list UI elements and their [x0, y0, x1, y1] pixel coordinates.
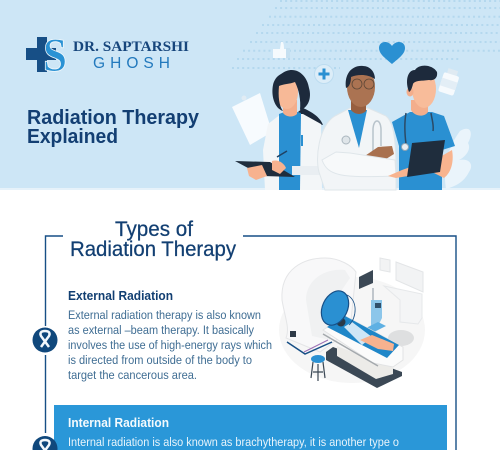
- item: internal radiation: [32, 405, 447, 450]
- scanner body: [282, 258, 356, 352]
- external radiation body text: as external –beam therapy. It basically: [68, 323, 255, 337]
- section heading: [70, 217, 236, 261]
- title: Explained: [27, 125, 118, 148]
- logo icon: cross with S: [26, 29, 67, 82]
- title: [27, 106, 200, 148]
- header banner: [0, 0, 500, 190]
- section heading: Types of: [115, 217, 193, 241]
- external radiation heading: External Radiation: [68, 288, 173, 303]
- doctor: woman: [235, 70, 323, 190]
- doctor: nurse: [388, 66, 455, 190]
- machine base trim: [304, 340, 328, 352]
- logo surname: GHOSH: [93, 55, 170, 72]
- stool: [311, 355, 325, 381]
- icon: ribbon: [32, 328, 58, 352]
- item: external radiation: [32, 288, 272, 382]
- icon: pill bottle: [438, 67, 461, 96]
- section heading: Radiation Therapy: [70, 237, 236, 261]
- panel: types of radiation therapy: [32, 217, 456, 450]
- clipboard paper: [232, 93, 272, 145]
- internal radiation heading: Internal Radiation: [68, 415, 169, 430]
- table top: [323, 316, 403, 367]
- title: Radiation Therapy: [27, 106, 200, 129]
- external radiation body text: involves the use of high-energy rays which: [68, 338, 272, 352]
- logo icon: cross with S: S: [43, 29, 67, 82]
- frame outline: [46, 236, 456, 450]
- logo name: DR. SAPTARSHI: [73, 39, 189, 55]
- iv stand: [366, 288, 386, 332]
- icon: ribbon: [32, 436, 58, 450]
- bore hood: [316, 286, 354, 330]
- illustration: patient in radiation machine: [279, 258, 425, 388]
- cabinet: [384, 286, 422, 324]
- doctor: man: [318, 66, 396, 190]
- logo: [26, 29, 189, 82]
- internal radiation panel background: [54, 405, 447, 450]
- plant leaves: [445, 129, 471, 189]
- external radiation body text: target the cancerous area.: [68, 368, 197, 382]
- icon: thumbs up: [273, 42, 290, 58]
- external radiation body text: External radiation therapy is also known: [68, 308, 261, 322]
- monitor: [359, 270, 373, 289]
- table base: [326, 347, 402, 388]
- external radiation body text: is directed from outside of the body to: [68, 353, 252, 367]
- internal radiation body text: Internal radiation is also known as brachytherapy, it is another type o: [68, 435, 399, 449]
- icon: plus badge: [314, 64, 334, 84]
- wall pictures: [380, 258, 423, 292]
- external radiation body text: [68, 308, 272, 382]
- patient: [336, 318, 394, 351]
- grey floor shadow: [388, 330, 414, 346]
- icon: heart: [379, 42, 405, 64]
